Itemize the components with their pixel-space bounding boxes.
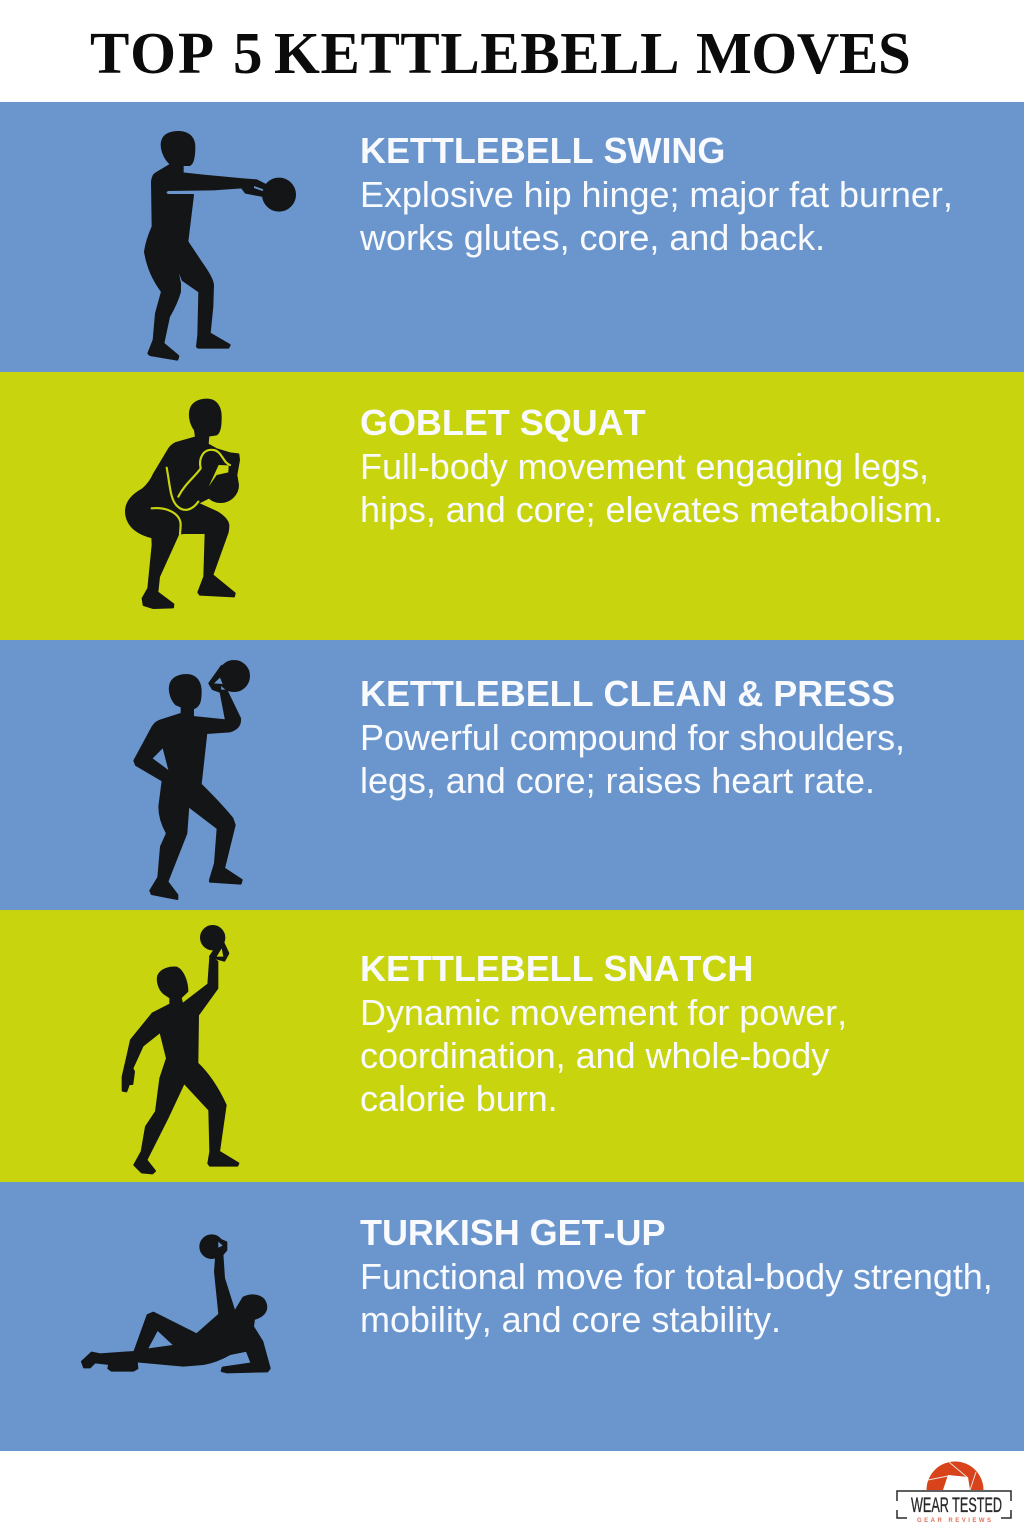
text: goblet squat: Full-body movement engaging legs, xyxy=(360,446,929,487)
text: kettlebell snatch xyxy=(360,948,847,1119)
title: KETTLEBELL xyxy=(274,20,680,86)
text: turkish get-up: TURKISH GET-UP xyxy=(360,1212,665,1253)
text: goblet squat xyxy=(360,402,943,530)
icon: swing figure xyxy=(145,132,295,360)
panel: kettlebell snatch xyxy=(0,910,1024,1182)
text: kettlebell swing xyxy=(360,130,953,258)
text: goblet squat: hips, and core; elevates metabolism. xyxy=(360,489,943,530)
text: kettlebell swing: KETTLEBELL SWING xyxy=(360,130,725,171)
title xyxy=(90,20,910,86)
logo: wear tested: GEAR REVIEWS xyxy=(917,1518,991,1524)
icon: clean and press figure xyxy=(134,661,249,899)
text: kettlebell snatch: KETTLEBELL SNATCH xyxy=(360,948,753,989)
text: kettlebell snatch: calorie burn. xyxy=(360,1078,558,1119)
logo: wear tested xyxy=(897,1462,1011,1524)
icon: turkish get-up figure xyxy=(82,1235,270,1372)
title: TOP xyxy=(90,20,216,86)
text: kettlebell swing: works glutes, core, and back. xyxy=(360,217,825,258)
panel: turkish get-up xyxy=(0,1182,1024,1451)
text: turkish get-up: mobility, and core stability. xyxy=(360,1299,781,1340)
text: kettlebell snatch: coordination, and whole-body xyxy=(360,1035,829,1076)
text: clean and press xyxy=(360,673,905,801)
text: clean and press: Powerful compound for shoulders, xyxy=(360,717,905,758)
title: 5 xyxy=(233,20,263,86)
text: turkish get-up xyxy=(360,1212,993,1340)
icon: goblet squat figure xyxy=(126,400,239,608)
panel: goblet squat xyxy=(0,372,1024,640)
panel: clean and press xyxy=(0,640,1024,910)
text: clean and press: legs, and core; raises heart rate. xyxy=(360,760,875,801)
icon: snatch figure xyxy=(123,926,238,1173)
title: MOVES xyxy=(696,20,910,86)
text: goblet squat: GOBLET SQUAT xyxy=(360,402,646,443)
text: turkish get-up: Functional move for total-body strength, xyxy=(360,1256,993,1297)
text: kettlebell snatch: Dynamic movement for power, xyxy=(360,992,847,1033)
panel: kettlebell swing xyxy=(0,102,1024,372)
text: kettlebell swing: Explosive hip hinge; major fat burner, xyxy=(360,174,953,215)
text: clean and press: KETTLEBELL CLEAN & PRESS xyxy=(360,673,895,714)
